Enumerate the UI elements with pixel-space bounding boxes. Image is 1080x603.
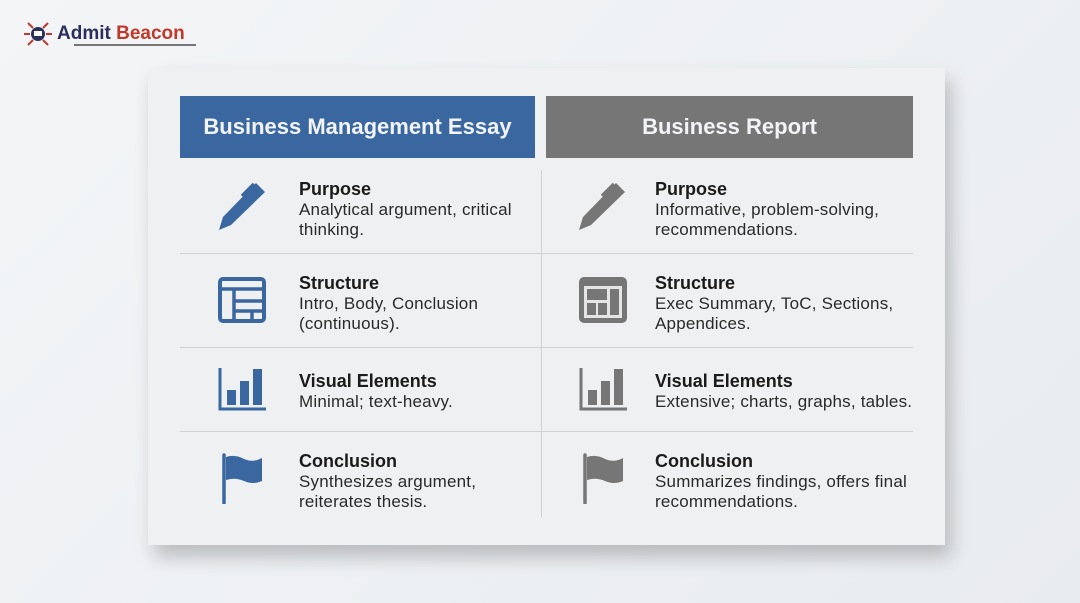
text: essay conclusion: Synthesizes argument, — [299, 472, 476, 491]
text: report conclusion: Conclusion — [655, 451, 753, 471]
text: report purpose: recommendations. — [655, 220, 798, 239]
text: essay visual: Visual Elements — [299, 371, 437, 391]
text: report purpose: Purpose — [655, 179, 727, 199]
text: report conclusion: Summarizes findings, offers final — [655, 472, 907, 491]
text: report structure — [655, 273, 893, 333]
text: essay purpose — [299, 179, 512, 239]
icon: pen blue — [219, 182, 265, 230]
header: report: Business Report — [642, 114, 817, 139]
text: report visual: Visual Elements — [655, 371, 793, 391]
text: essay structure: Intro, Body, Conclusion — [299, 294, 478, 313]
icon: flag gray — [583, 453, 623, 504]
header: report — [546, 96, 913, 158]
icon: flag blue — [222, 453, 262, 504]
icon: pen gray — [579, 182, 625, 230]
text: essay purpose: Analytical argument, critical — [299, 200, 512, 219]
logo: Admit Beacon — [57, 23, 185, 44]
text: report conclusion — [655, 451, 907, 511]
text: essay structure: (continuous). — [299, 314, 400, 333]
text: essay conclusion: Conclusion — [299, 451, 397, 471]
text: essay purpose: thinking. — [299, 220, 364, 239]
card — [148, 68, 945, 545]
text: essay structure — [299, 273, 478, 333]
icon: layout gray — [579, 277, 627, 323]
header: essay: Business Management Essay — [203, 114, 512, 139]
icon: chart gray — [580, 368, 627, 410]
icon: table blue — [218, 277, 266, 323]
text: report visual: Extensive; charts, graphs, tables. — [655, 392, 912, 411]
text: essay conclusion: reiterates thesis. — [299, 492, 427, 511]
text: essay structure: Structure — [299, 273, 379, 293]
text: essay purpose: Purpose — [299, 179, 371, 199]
text: report purpose — [655, 179, 879, 239]
text: report structure: Exec Summary, ToC, Sections, — [655, 294, 893, 313]
text: report structure: Appendices. — [655, 314, 751, 333]
text: essay visual — [299, 371, 453, 411]
text: essay visual: Minimal; text-heavy. — [299, 392, 453, 411]
logo — [24, 22, 196, 46]
header: essay — [180, 96, 535, 158]
text: report visual — [655, 371, 912, 411]
text: report structure: Structure — [655, 273, 735, 293]
text: report conclusion: recommendations. — [655, 492, 798, 511]
text: report purpose: Informative, problem-solving, — [655, 200, 879, 219]
text: essay conclusion — [299, 451, 476, 511]
icon: chart blue — [218, 368, 266, 410]
